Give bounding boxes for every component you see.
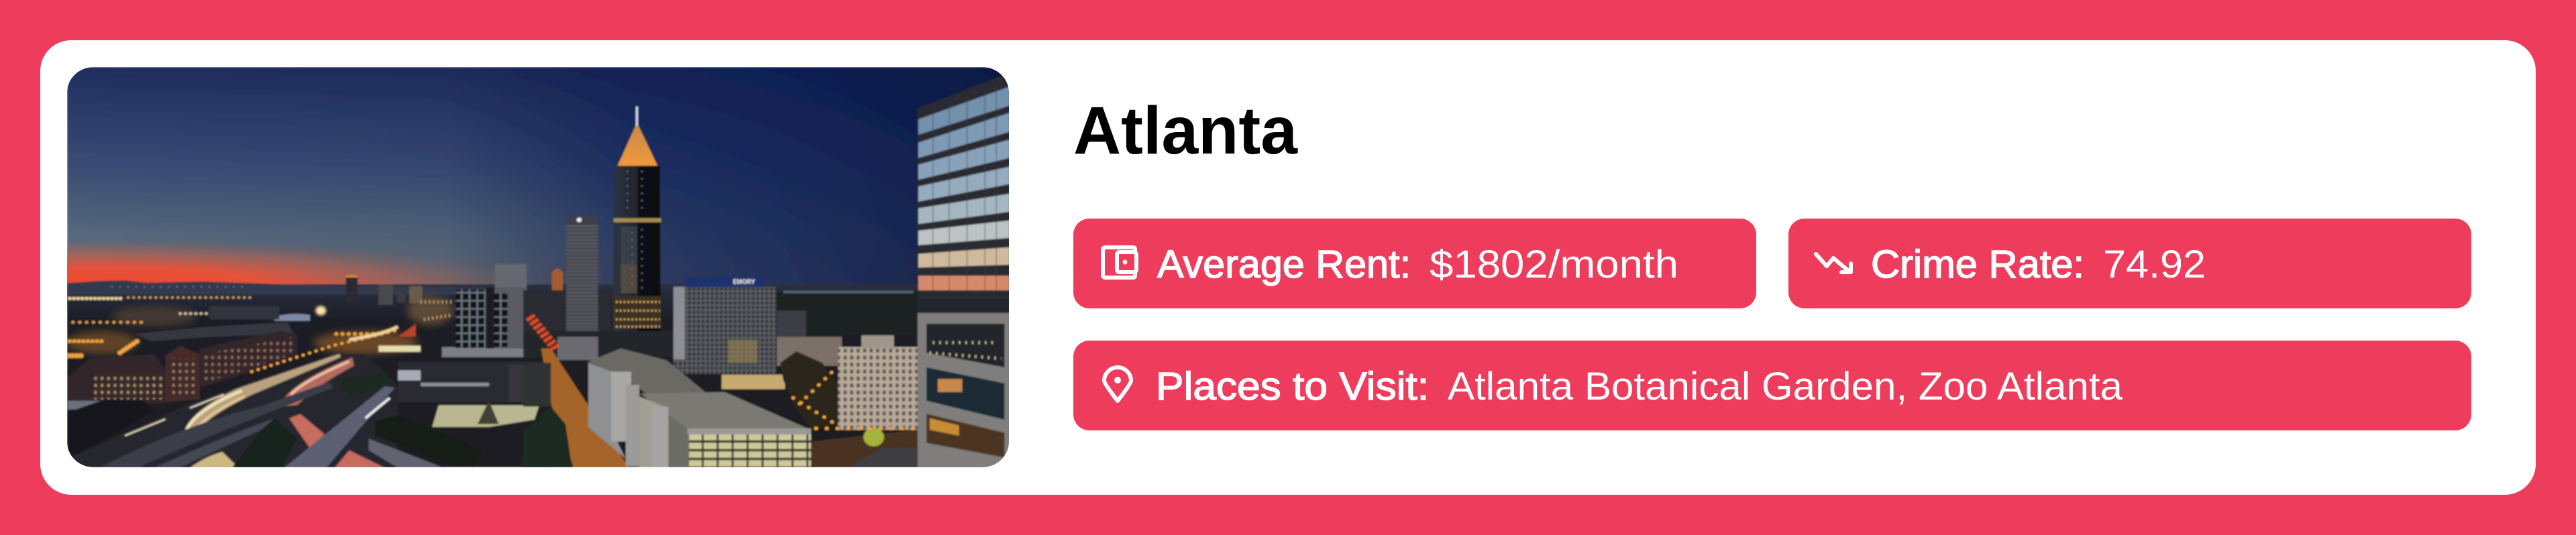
mid-distance low buildings (135, 322, 294, 341)
trees with orange lights (780, 351, 837, 430)
trees (76, 377, 153, 411)
green corner tree (521, 459, 525, 467)
glass office tower (918, 72, 1011, 314)
label: places to visit: Places to Visit: (1156, 365, 1429, 408)
distant forest (776, 291, 918, 313)
Bank of America Plaza tower (612, 107, 661, 331)
lamp rows along highway (252, 331, 394, 371)
concrete frame with openings (918, 313, 1010, 469)
black glass tower (455, 289, 487, 349)
icon: location pin (1104, 367, 1131, 401)
warm glow over the city (66, 296, 453, 354)
AT&T tower (566, 216, 598, 331)
traffic light trails (125, 324, 421, 468)
left half of the photo: city and highways (66, 264, 551, 468)
label: crime rate: Crime Rate: (1871, 243, 2084, 286)
value: crime rate: 74.92 (2103, 243, 2206, 286)
sky (0, 67, 1009, 333)
tan building (838, 347, 918, 430)
ground (67, 284, 1009, 467)
orange street (541, 349, 629, 468)
icon: wallet (1103, 247, 1136, 278)
highway deck (72, 354, 398, 468)
brick blocks (68, 354, 166, 404)
title: Atlanta (1073, 93, 1298, 168)
pill: places to visit (1073, 341, 2471, 430)
far-right street lights (527, 314, 550, 354)
downtown low blocks (398, 361, 551, 402)
distant hills (67, 280, 496, 294)
icon: trending down arrow (1816, 254, 1851, 272)
value: places to visit: Atlanta Botanical Garden, Zoo Atlanta (1448, 365, 2123, 408)
lit park (432, 405, 539, 427)
pill: crime rate (1788, 219, 2471, 308)
tall tower beside glass block (495, 264, 527, 349)
right half of the photo: towers (523, 72, 1011, 469)
photo: Atlanta skyline at dusk (0, 67, 1011, 469)
lit garage front (688, 428, 811, 468)
parking garage roof and sides (588, 347, 706, 394)
lower forecourt (811, 430, 918, 468)
distant lights (68, 287, 375, 356)
trees and embankment (232, 418, 297, 468)
label: average rent: Average Rent: (1157, 243, 1411, 286)
low blocks (523, 290, 611, 331)
Emory building (674, 277, 785, 389)
far towers (345, 276, 358, 296)
starburst light (316, 306, 326, 315)
overpasses (99, 382, 394, 468)
Emory building: EMORY (733, 278, 755, 286)
value: average rent: $1802/month (1430, 243, 1678, 286)
pill: average rent (1073, 219, 1756, 308)
